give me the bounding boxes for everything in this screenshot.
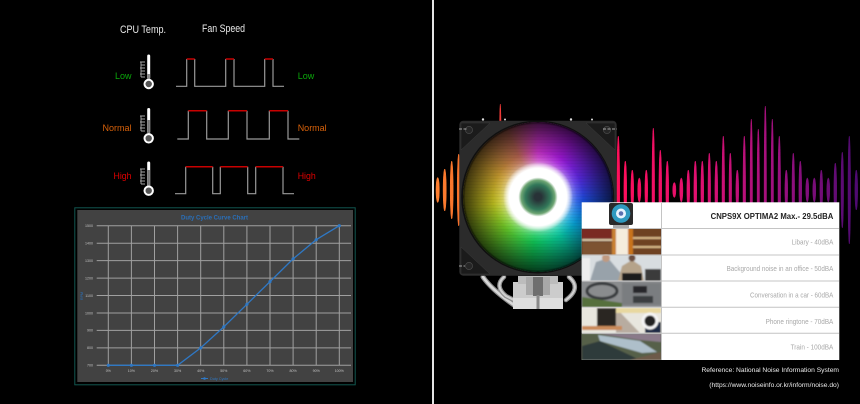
low pulse wave [176,59,284,86]
y axis labels: 1000 [85,311,93,315]
x axis labels: 70% [266,369,274,373]
x axis labels [106,369,345,373]
row: high temperature [114,163,316,195]
x axis labels: 30% [174,369,182,373]
fan rotor shading [463,122,613,272]
row: high temperature: High [114,170,132,181]
high pulse wave [175,167,294,194]
sound waveform [436,104,858,244]
icon: thermometer normal [140,110,153,142]
heading: Fan Speed: Fan Speed [202,23,245,35]
row: normal temperature [102,110,327,142]
x axis labels: 0% [106,369,112,373]
y axis labels: 700 [87,364,93,368]
photo: office [580,254,663,281]
chart legend [201,377,228,381]
y axis labels: 1100 [85,294,93,298]
y axis labels: 1200 [85,276,93,280]
row: low temperature: Low [298,70,314,81]
panel: CPU temperature and fan speed pulses [102,23,327,196]
reference note [701,367,839,389]
chart frame [75,208,355,385]
chart title: Duty Cycle Curve Chart [181,216,248,222]
icon: thermometer low [140,56,153,88]
row labels: Libary - 40dBA [792,238,833,246]
row: normal temperature: Normal [298,122,327,133]
photo: train [580,333,663,360]
product: CPU cooler body [459,118,617,309]
row labels [727,238,833,352]
photo: library [580,227,663,256]
icon: thermometer high [140,163,153,195]
row: low temperature [115,56,314,88]
row dividers [582,203,839,360]
row: normal temperature: Normal [102,122,132,133]
x axis labels: 40% [197,369,205,373]
heat pipes [483,277,575,305]
x axis labels: 20% [151,369,159,373]
y axis labels: 1500 [85,224,93,228]
line chart: duty cycle curve [74,207,356,386]
fan rotor with rainbow lighting [463,122,613,272]
row: low temperature: Low [115,70,132,81]
y axis labels: 900 [87,329,93,333]
row labels: Train - 100dBA [791,342,833,352]
x axis labels: 90% [313,369,321,373]
row: CNPS9X OPTIMA2: CNPS9X OPTIMA2 Max.- 29.5dBA [711,212,834,221]
data line [107,224,341,367]
noise comparison table [582,202,840,360]
reference note: Reference: National Noise Information System [701,367,839,374]
row: CNPS9X OPTIMA2 [609,203,834,228]
normal pulse wave [177,111,299,139]
heatsink base [513,276,563,309]
y axis labels: 800 [87,346,93,350]
heading: CPU Temp.: CPU Temp. [120,24,166,36]
divider between panels [432,0,434,404]
y axis labels: 1400 [85,242,93,246]
photo: phone ringtone [580,307,663,333]
x axis labels: 80% [289,369,297,373]
icon: cooler thumbnail [609,203,633,228]
fan glowing hub ring [503,162,573,232]
row: high temperature: High [298,170,316,181]
x axis labels: 60% [243,369,251,373]
x axis labels: 100% [335,369,345,373]
y axis labels [85,224,93,368]
chart legend: Duty Cycle [210,377,228,381]
fan frame [459,118,617,276]
x axis labels: 50% [220,369,228,373]
photo: car interior [580,281,663,307]
x axis labels: 10% [128,369,136,373]
reference note: (https://www.noiseinfo.or.kr/inform/noise.do) [709,382,839,389]
y axis labels: 1300 [85,259,93,263]
y axis title: RPM [80,292,84,300]
